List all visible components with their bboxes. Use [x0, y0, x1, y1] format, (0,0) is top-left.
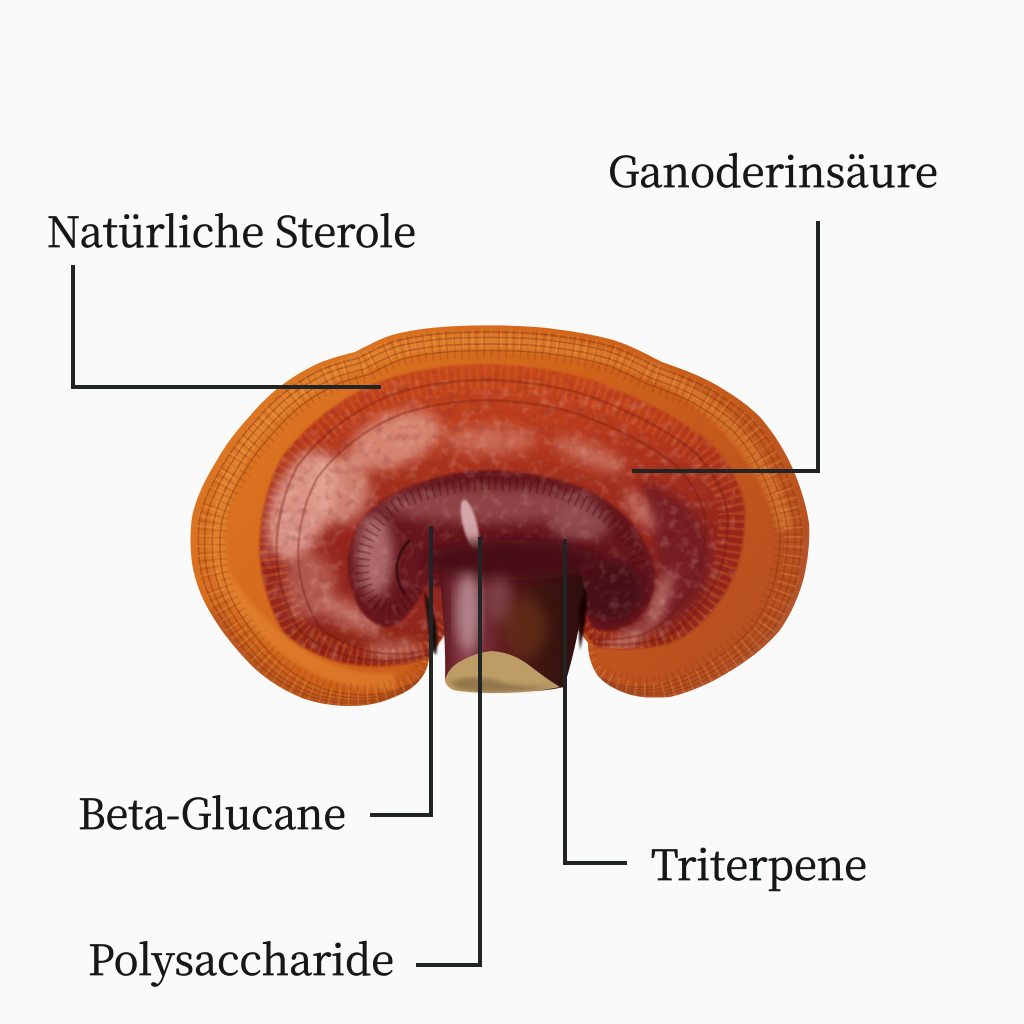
cap: gloss mottling: [255, 380, 735, 660]
label text: Beta-Glucane: [78, 782, 346, 842]
label text: Natürliche Sterole: [47, 200, 416, 260]
label text: Triterpene: [651, 833, 867, 893]
label text: Ganoderinsäure: [608, 140, 938, 200]
cap: concentric ridges: [198, 332, 802, 703]
cap: rim bright band: [217, 341, 785, 681]
stem top shadow: [424, 540, 600, 580]
stem: [438, 555, 585, 691]
cap: red band streaks: [272, 376, 733, 662]
leader line: [73, 265, 381, 387]
cap: outer orange rim: [190, 325, 809, 706]
mushroom illustration: [190, 325, 812, 712]
cap: right dark crimson: [610, 480, 712, 638]
cap: rim right edge: [598, 530, 812, 702]
dark crease left: [424, 590, 437, 655]
label: Ganoderinsäure: [608, 140, 938, 471]
stem brown patch: [503, 598, 547, 658]
stem highlight: [456, 572, 480, 652]
cap: inner ridge rings: [277, 380, 728, 661]
cap: rim radial streaks: [206, 339, 794, 700]
label text: Polysaccharide: [88, 928, 394, 988]
stem cut base shading: [450, 677, 552, 692]
cap: red band: [260, 364, 745, 666]
leader line: [565, 539, 627, 863]
leader line: [632, 221, 818, 471]
label: Triterpene: [565, 539, 867, 893]
cap: rim lower brown edge: [210, 610, 432, 712]
label: Beta-Glucane: [78, 526, 431, 842]
leader line: [416, 537, 480, 965]
cap: dark mottling: [255, 360, 745, 660]
stem cut base: [445, 651, 560, 693]
label: Natürliche Sterole: [47, 200, 416, 387]
dark crease right: [579, 588, 587, 650]
label: Polysaccharide: [88, 537, 480, 988]
cap: inner lobe around stem: [345, 470, 660, 631]
cap: left pink gloss: [252, 399, 677, 658]
leader line: [370, 526, 431, 815]
lobe: pink gloss: [357, 513, 393, 597]
